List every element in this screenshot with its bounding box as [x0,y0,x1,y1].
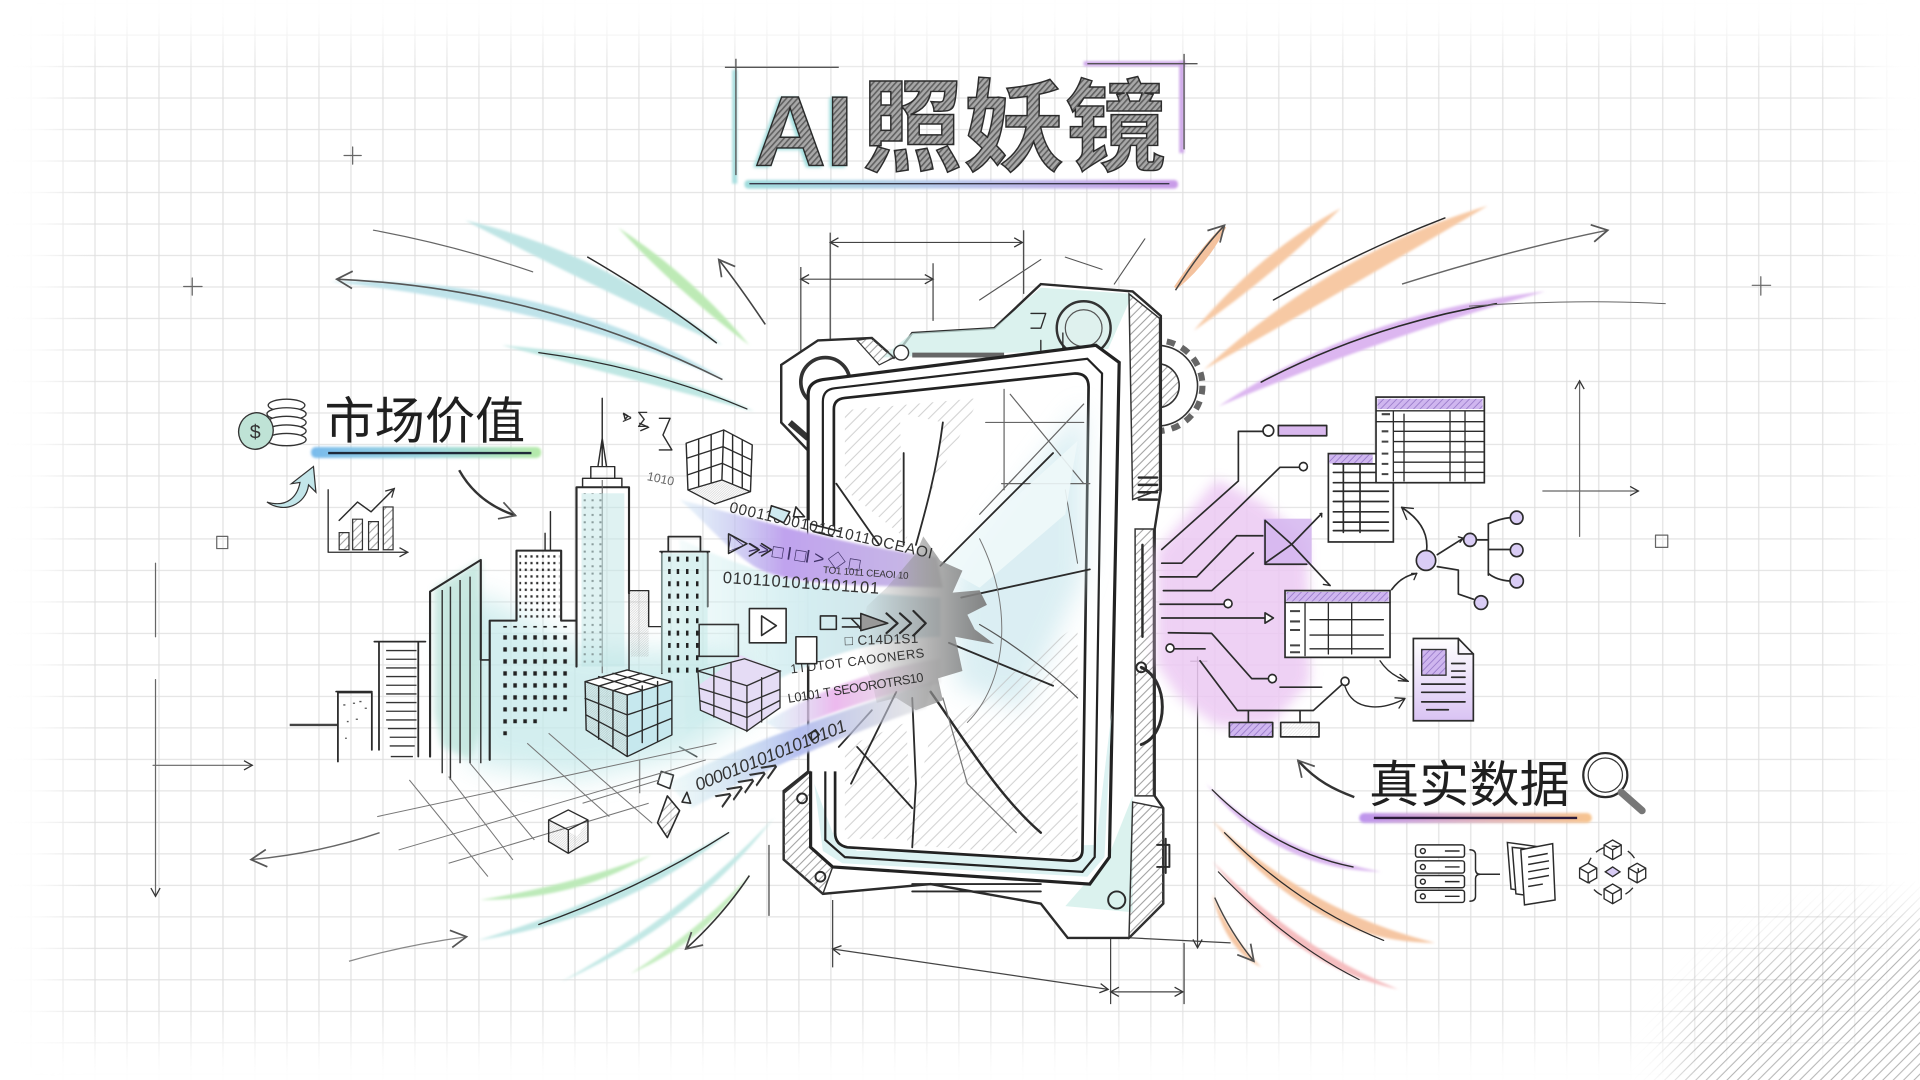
title frame and underline [725,54,1198,189]
glass tower [430,560,490,780]
burst strokes upper right [1176,206,1665,407]
underline [311,447,541,458]
circuit traces [1160,425,1349,737]
network nodes [1392,507,1523,609]
skyscraper [577,398,629,673]
table B [1328,454,1393,542]
stream binary text: 0101101010101101 [722,568,880,598]
vents, ring and bolts [797,239,1169,909]
frame teal accent [814,710,1112,877]
teal wash [449,593,756,780]
data streams into mirror [622,408,994,838]
stream binary text: TO1 1011 CEAOI 10 [823,565,909,582]
mirror device [781,239,1202,938]
icon: coins: $ [250,421,261,443]
purple band [680,500,943,588]
icon: mini bar chart [328,489,408,552]
top left wheel [790,338,1004,438]
icon: magnifier [1583,753,1642,811]
label: real data [1298,753,1646,905]
stream binary text: >>>>> [709,751,786,817]
stream binary text: 1010 [646,469,676,489]
arrow to data [1298,760,1354,797]
large data cube [585,670,672,757]
left panel: city [290,398,756,877]
pink band [765,659,940,732]
icon: servers [1416,845,1500,902]
right side colour cube [698,624,780,731]
stream binary text: 1TOTOT CAOONERS [790,645,925,676]
icon: coins [234,399,306,454]
stream binary text [622,408,934,817]
stream icons [658,506,926,838]
real data heading: 真实数据 [1369,757,1570,813]
small glyph marks [624,413,672,450]
market value heading: 市场价值 [324,393,525,449]
perspective floor grid [377,733,717,877]
body teal fill [882,288,1133,912]
icon: cube network [1580,840,1646,904]
drafting marks [153,147,1771,896]
burst strokes lower left [251,818,774,982]
windowed building [490,512,575,760]
icon: stacked documents [1507,842,1555,905]
stream binary text: 0001100010101011OCEAOI [728,499,934,563]
title [725,54,1198,189]
purple wash [1157,479,1310,726]
label: market value [234,393,541,552]
shattered impact core [857,536,994,710]
stream binary text: L0101 T SEOOROTRS10 [787,670,924,706]
connector block [629,591,661,657]
device body [781,284,1163,938]
blue band [667,681,933,808]
title: 照妖镜 [862,73,1166,185]
underline [1359,813,1592,823]
stream binary text: ▷ >> □ I □I > ◇ □ [725,533,862,575]
small sketch cube [549,810,588,853]
right tower [660,537,709,673]
corner pencil shading [1652,892,1920,1080]
connector arrows [1320,507,1463,708]
small building [290,692,372,762]
arrow into city [459,470,516,516]
stream binary text: 00001010101010101 [692,716,849,795]
icon: rising arrow [267,467,316,507]
burst strokes upper left [331,220,765,411]
shards and cracks [836,413,1090,847]
dimension lines around mirror [769,230,1231,1004]
stream binary text: > ∑ [622,408,649,428]
top right wheel [1031,301,1111,355]
right panel: real data [1157,397,1523,737]
glass [834,373,1090,861]
document [1413,639,1473,721]
inner frame [823,359,1102,872]
teal central band [680,539,940,735]
gear [1112,340,1202,431]
diagram node [1263,514,1330,585]
burst strokes lower right [1206,784,1435,989]
table C [1285,591,1390,657]
upper data cube [686,430,752,504]
table A [1376,397,1484,483]
outer frame [808,345,1119,884]
title: AI [754,76,853,187]
right column hatching [784,294,1163,938]
stream binary text: □ C14D1S1 [844,631,918,648]
lined building [374,642,425,757]
